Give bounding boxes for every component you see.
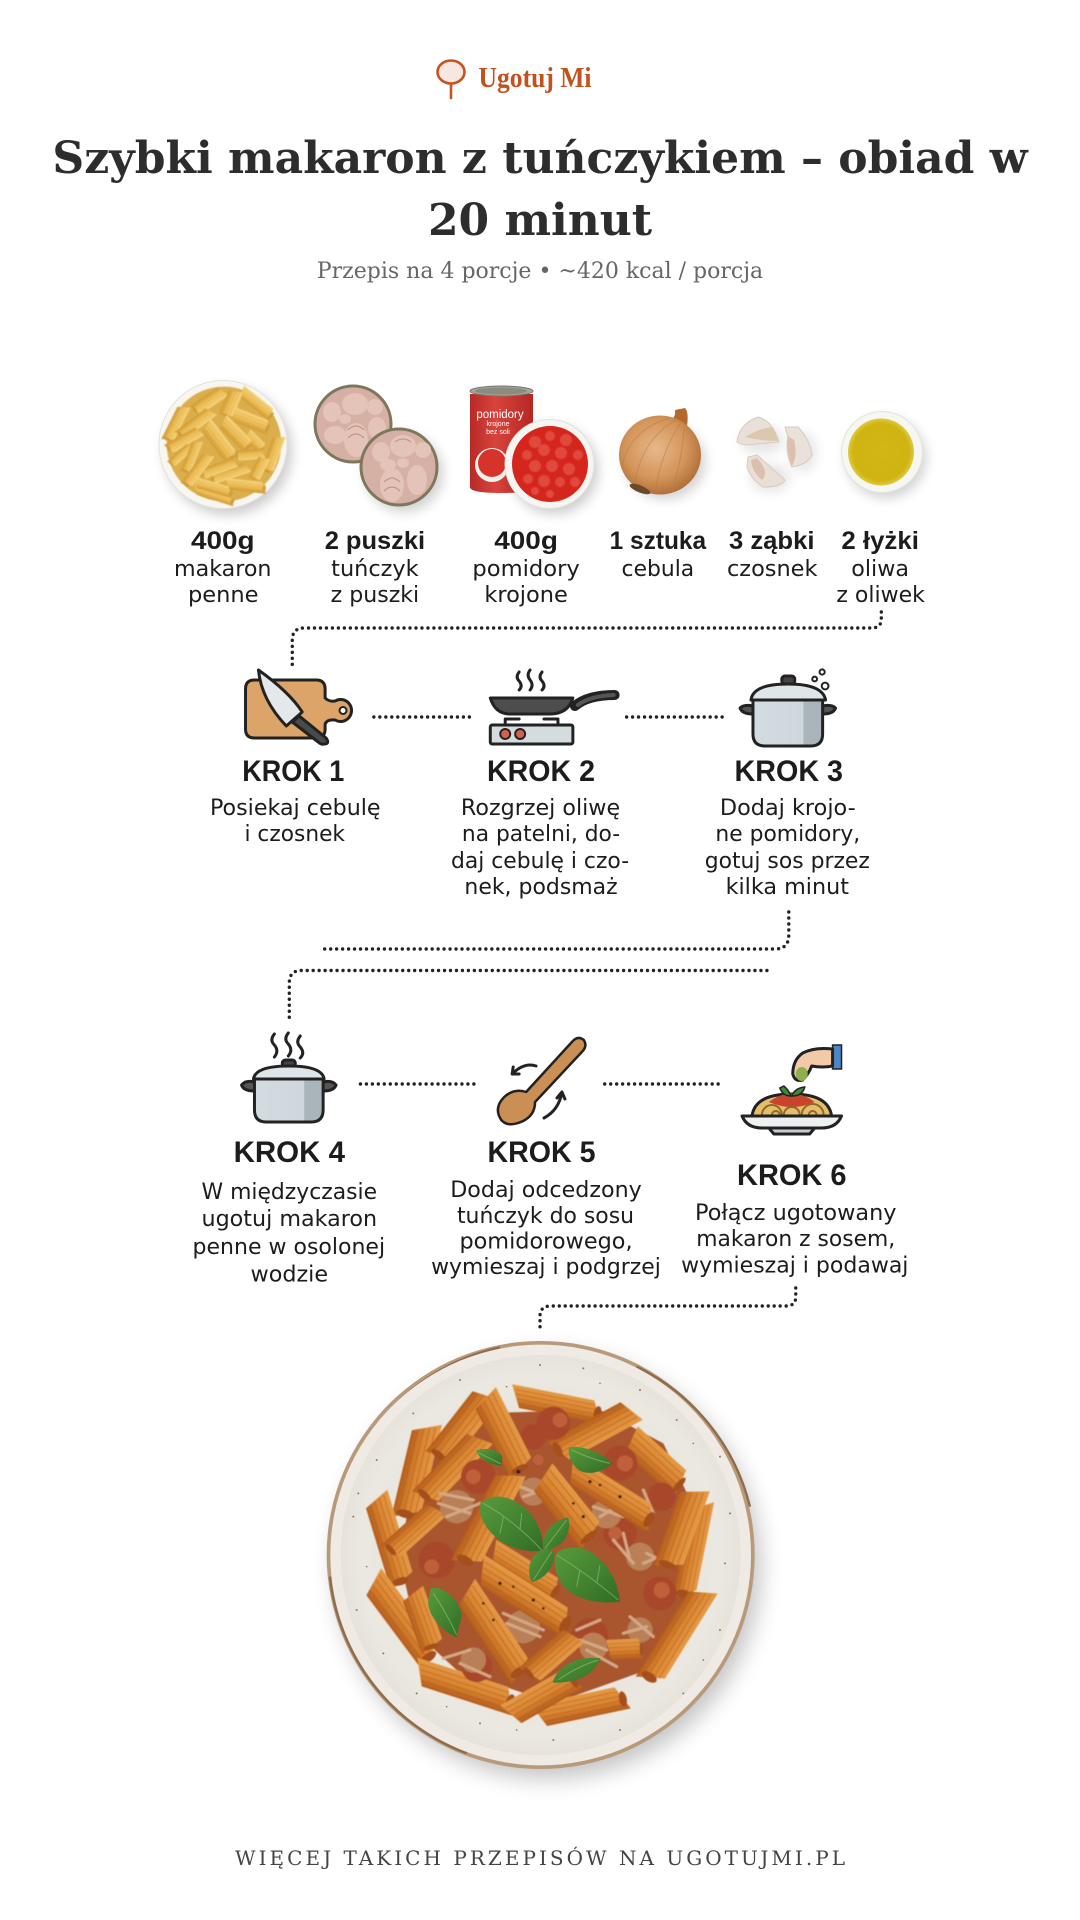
label: czosnek: 3 ząbki — [729, 527, 814, 555]
icon: olive oil bowl — [842, 412, 926, 498]
arrow: step 3 onward — [319, 912, 789, 949]
label: czosnek — [727, 527, 817, 582]
icon: wooden spoon with stirring arrows — [498, 1038, 585, 1124]
text: step 3: Dodaj krojo- — [720, 795, 856, 821]
text: step 1: Posiekaj cebulę — [210, 795, 381, 821]
icon: pot with bubbles — [740, 669, 836, 746]
icon: plate of spaghetti with hand — [742, 1045, 842, 1134]
arrow: to step 4 — [289, 970, 767, 1020]
text: step 6 — [681, 1200, 908, 1279]
step 6 — [681, 1045, 908, 1279]
title: 20 minut — [428, 195, 653, 246]
label: tuńczyk: 2 puszki — [325, 527, 425, 555]
icon: frying pan on stove — [490, 670, 615, 744]
label: makaron: penne — [188, 582, 259, 608]
subtitle: Przepis na 4 porcje • ~420 kcal / porcja — [317, 259, 763, 284]
step 5 — [431, 1038, 661, 1280]
text: step 1: i czosnek — [245, 821, 345, 847]
label: tuńczyk — [325, 527, 425, 608]
text: step 6: wymieszaj i podawaj — [681, 1252, 908, 1279]
label: pomidory — [472, 527, 580, 608]
label: cebula — [610, 527, 707, 582]
label: oliwa: z oliwek — [836, 582, 925, 608]
text: step 5: pomidorowego, — [459, 1228, 633, 1255]
heading: KROK 2: KROK 2 — [487, 755, 595, 788]
icon: tomato can and bowl: pomidory — [476, 409, 524, 421]
label: makaron — [174, 527, 271, 608]
logo: Ugotuj Mi — [438, 60, 592, 98]
icon: penne bowl — [159, 380, 292, 515]
text: step 3: kilka minut — [726, 874, 849, 900]
label: makaron: makaron — [174, 556, 271, 582]
arrow: ingredients to step 1 — [292, 612, 881, 665]
text: step 2: daj cebulę i czo- — [451, 848, 629, 874]
title — [52, 133, 1029, 246]
text: step 4: W międzyczasie — [201, 1179, 377, 1205]
icon: boiling pot — [242, 1033, 336, 1122]
icon: tomato can and bowl: bez soli — [486, 429, 510, 436]
connector 5-6 — [605, 1082, 724, 1086]
text: step 4: penne w osolonej — [193, 1234, 385, 1260]
text: step 6: makaron z sosem, — [696, 1226, 895, 1252]
label: oliwa: 2 łyżki — [841, 527, 919, 555]
label: tuńczyk: z puszki — [331, 582, 419, 608]
text: step 2: Rozgrzej oliwę — [461, 795, 620, 821]
connector 1-2 — [374, 715, 473, 719]
label: pomidory: pomidory — [472, 556, 580, 582]
icon: spoon logo — [438, 60, 464, 98]
connector 4-5 — [360, 1082, 478, 1086]
icon: tomato can and bowl: krojone — [487, 421, 510, 428]
text: step 3: gotuj sos przez — [705, 848, 870, 874]
step 2 — [451, 670, 629, 900]
text: step 5: wymieszaj i podgrzej — [431, 1254, 661, 1280]
text: step 2: nek, podsmaż — [464, 874, 618, 900]
icon: basil leaves — [428, 1447, 620, 1683]
step 3 — [705, 669, 870, 900]
label: oliwa — [836, 527, 925, 608]
text: step 5: Dodaj odcedzony — [450, 1177, 642, 1203]
heading: KROK 4: KROK 4 — [234, 1136, 345, 1169]
icon: penne with tuna sauce — [359, 1383, 718, 1728]
text: step 4 — [193, 1179, 385, 1288]
label: cebula: cebula — [622, 556, 694, 582]
text: step 2 — [451, 795, 629, 900]
text: step 4: wodzie — [250, 1261, 328, 1288]
connector 2-3 — [627, 715, 726, 719]
icon: garlic cloves — [737, 417, 816, 492]
icon: tuna cans — [315, 386, 443, 512]
arrow: step 6 to plate — [540, 1288, 796, 1327]
step 1 — [210, 670, 381, 847]
text: step 5 — [431, 1177, 661, 1280]
label: makaron: 400g — [191, 527, 255, 555]
heading: KROK 6: KROK 6 — [737, 1159, 846, 1192]
heading: KROK 3: KROK 3 — [735, 755, 843, 788]
icon: onion — [619, 408, 705, 499]
text: step 3 — [705, 795, 870, 900]
title: Szybki makaron z tuńczykiem – obiad w — [52, 133, 1029, 184]
label: czosnek: czosnek — [727, 556, 817, 582]
text: step 1 — [210, 795, 381, 847]
text: step 6: Połącz ugotowany — [695, 1200, 896, 1226]
text: step 4: ugotuj makaron — [201, 1206, 377, 1232]
label: tuńczyk: tuńczyk — [331, 556, 419, 582]
logo wordmark: Ugotuj Mi — [478, 63, 592, 94]
heading: KROK 1: KROK 1 — [242, 755, 344, 788]
label: cebula: 1 sztuka — [610, 527, 707, 555]
step 4 — [193, 1033, 385, 1288]
label: oliwa: oliwa — [851, 556, 909, 582]
panel: steps — [193, 612, 908, 1327]
icon: tomato can and bowl — [470, 386, 598, 514]
text: step 5: tuńczyk do sosu — [457, 1203, 634, 1229]
label: pomidory: 400g — [494, 527, 558, 555]
ingredient labels — [174, 527, 925, 608]
text: step 3: ne pomidory, — [715, 821, 860, 847]
footer: WIĘCEJ TAKICH PRZEPISÓW NA UGOTUJMI.PL — [235, 1845, 845, 1870]
panel: ingredients — [159, 380, 926, 608]
label: pomidory: krojone — [484, 582, 568, 608]
heading: KROK 5: KROK 5 — [488, 1136, 596, 1169]
icon: plate — [327, 1341, 755, 1769]
text: step 2: na patelni, do- — [462, 821, 620, 847]
icon: cutting board and knife — [246, 670, 352, 744]
panel: finished dish — [327, 1341, 760, 1778]
